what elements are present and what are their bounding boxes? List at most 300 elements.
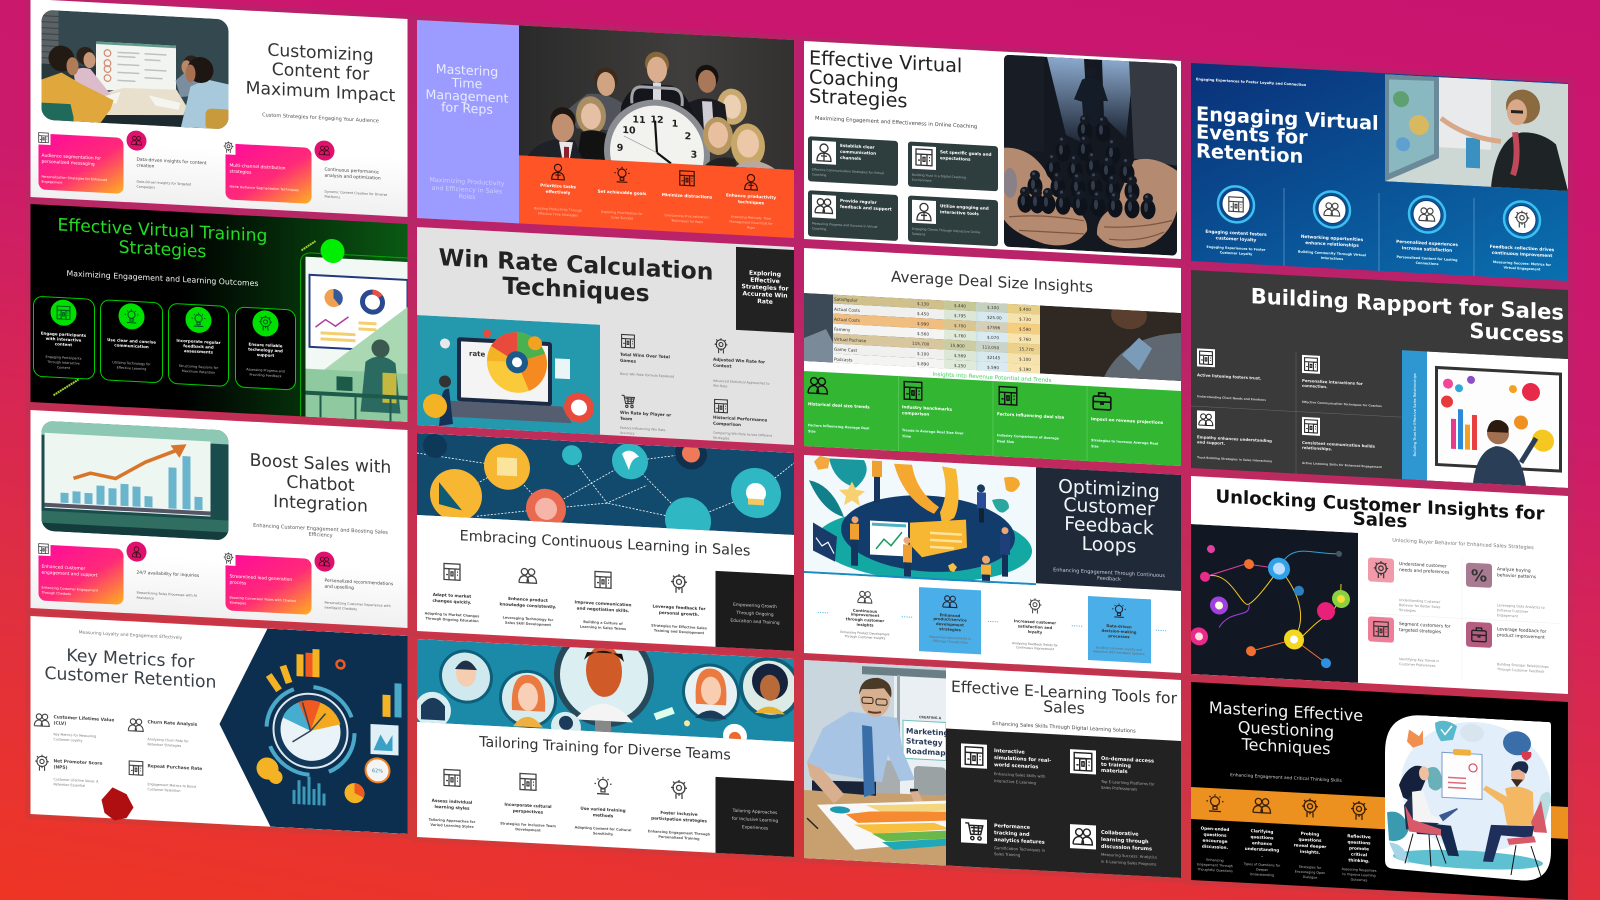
photo: revenue table: $.130 — [917, 301, 929, 307]
metric: historical performance: Strategies — [713, 436, 730, 441]
item 4: personal growth. — [659, 610, 700, 617]
title: Embracing Continuous Learning in Sales — [460, 528, 750, 560]
card 2: creation — [136, 163, 155, 170]
loop steps: processes — [1108, 633, 1130, 639]
coaching card 1: channels — [840, 155, 862, 161]
metric: win rate by player: Factors Influencing Win Rate — [620, 426, 665, 432]
green accent dot and outline — [300, 237, 408, 422]
title: Techniques — [502, 272, 650, 307]
dark tools panel: Gamification Techniques in — [994, 845, 1046, 853]
item 1: Varied Learning Styles — [430, 823, 474, 829]
dark tools panel — [946, 729, 1181, 878]
photo: revenue table: $.560 — [917, 331, 929, 337]
woman — [1399, 765, 1459, 868]
title: Success — [1469, 318, 1564, 348]
photo: revenue table: $.100 — [1019, 356, 1031, 362]
item: consistent communication: Active Listening Skills for Enhanced Engagement — [1302, 461, 1383, 469]
card 3: Niche Audience Segmentation Techniques — [230, 185, 299, 192]
subtitle: Maximizing Engagement and Effectiveness in Online Coaching — [815, 116, 977, 130]
task columns: Exploring Prioritization for — [601, 210, 643, 216]
task columns: Sales Success — [611, 215, 633, 220]
metric: adjusted win rate: Adjusted Win Rate for — [713, 357, 766, 364]
dark title panel: Feedback — [1097, 576, 1121, 583]
blue highlight cards — [919, 587, 1151, 663]
loop steps — [817, 587, 1167, 657]
coaching card 1: Effective Communication Strategies for Virtual — [812, 167, 884, 175]
item 4 — [648, 778, 711, 842]
photo: revenue table: Game Cast — [834, 347, 857, 353]
photo: revenue table: $.760 — [1019, 336, 1031, 342]
question types: Dialogue — [1303, 875, 1317, 880]
orange band with icons — [1191, 787, 1568, 839]
blonde woman back — [717, 88, 747, 125]
title: Effective E-Learning Tools for — [951, 678, 1178, 708]
photo: revenue table: $.890 — [917, 361, 929, 367]
item 4: Enhancing Engagement Through — [648, 829, 711, 837]
card 1 — [36, 130, 124, 194]
loop steps: insights — [856, 622, 874, 628]
training cards: feedback and — [183, 343, 214, 350]
question types: insights. — [1300, 849, 1321, 855]
title: Key Metrics for — [66, 646, 195, 673]
black callout: Through Ongoing — [735, 610, 774, 618]
lilac side panel: Roles — [459, 193, 475, 201]
photo: meeting at a whiteboard — [42, 10, 232, 132]
question types: questions — [1298, 837, 1322, 843]
question types: Outcomes — [1351, 877, 1368, 882]
coaching card 1: Establish clear — [840, 143, 876, 150]
dark tools panel: Performance — [994, 823, 1031, 831]
photo: revenue table: 15,770 — [1019, 346, 1034, 352]
insight 1 — [1368, 557, 1450, 615]
item 4: Training and Development — [654, 629, 705, 635]
metric: total wins — [620, 334, 674, 379]
item 1 — [425, 562, 479, 623]
question types: discussion. — [1202, 844, 1229, 850]
training cards: Content — [57, 365, 71, 370]
question types: Probing — [1301, 831, 1319, 837]
title: Sales — [1043, 698, 1085, 718]
title: Customizing — [267, 41, 374, 66]
card 3 — [222, 140, 312, 204]
training cards: Utilizing Technology for — [112, 360, 151, 366]
coaching card 3: feedback and support — [840, 204, 892, 212]
item 4 — [651, 572, 707, 635]
photo: team around a clock — [519, 26, 794, 170]
title: Integration — [273, 492, 368, 517]
insight 1: Understand customer — [1399, 561, 1447, 570]
slide: Mastering Time Management for Reps — [412, 15, 799, 243]
slide: Tailoring Training for Diverse Teams — [412, 617, 801, 862]
metric: churn: Churn Rate Analysis — [148, 719, 198, 728]
dark tools panel: materials — [1101, 768, 1128, 775]
coaching card 2: expectations — [940, 155, 971, 162]
green stats band: Historical deal size trends — [808, 401, 870, 410]
metric: NPS — [35, 754, 102, 789]
item 4: participation strategies — [651, 815, 707, 823]
event columns: increase satisfaction — [1402, 245, 1452, 254]
metric: CLV: Customer Loyalty — [53, 737, 83, 743]
blue strip: Building Trust for Effective Sales Relationships — [1413, 373, 1417, 457]
dark tools panel: On-demand access — [1101, 756, 1154, 765]
insight 3: targeted strategies — [1399, 627, 1442, 635]
black callout: Effective — [750, 277, 780, 285]
subtitle: Maximizing Engagement and Learning Outcomes — [67, 269, 258, 288]
item 3: Learning in Sales Teams — [580, 625, 626, 631]
insight 4: Leverage feedback for — [1497, 626, 1547, 635]
card 4: Platforms — [324, 195, 340, 199]
title: Coaching — [809, 65, 899, 93]
question types — [1196, 825, 1377, 883]
title: Win Rate Calculation — [439, 243, 713, 286]
question types: questions — [1203, 832, 1227, 838]
insight 2: Analyze buying — [1497, 566, 1531, 574]
item 1: Adapting to Market Changes — [425, 611, 479, 618]
dark title panel — [1036, 467, 1181, 591]
photo: revenue table: $2145 — [987, 355, 1001, 360]
card 4: analysis and optimization — [324, 173, 381, 182]
item 2 — [499, 567, 557, 627]
training cards: Maximum Retention — [182, 369, 215, 375]
item 2: Enhance product — [508, 596, 548, 603]
photo: revenue table: $.100 — [917, 351, 929, 357]
clock: 9 — [617, 143, 623, 154]
dashboard panel — [216, 626, 408, 834]
title: Mastering Effective — [1209, 698, 1363, 725]
card 2: Assistance — [136, 596, 154, 601]
loop steps: Continuous Improvement — [1016, 645, 1055, 651]
coaching card 2: Building Trust in a Digital Coaching — [912, 173, 966, 180]
insight 2: Leveraging Data Analytics to — [1497, 603, 1545, 610]
training cards: Incorporate regular — [176, 338, 221, 345]
question types: Understanding — [1250, 872, 1274, 877]
black callout: Accurate Win — [743, 290, 787, 300]
metric: win rate by player: Win Rate by Player or — [620, 410, 672, 418]
green stats band — [804, 371, 1181, 466]
question types: Clarifying — [1251, 828, 1273, 834]
dark tools panel: Enhancing Sales Skills with — [994, 771, 1046, 779]
question types: Types of Questions for — [1243, 862, 1281, 868]
poster board — [903, 714, 949, 761]
item: consistent communication — [1302, 417, 1383, 469]
item: active listening — [1197, 348, 1266, 402]
metric: CLV: (CLV) — [53, 720, 66, 727]
blonde woman left — [576, 95, 615, 160]
question types: Thoughtful Questions — [1196, 867, 1233, 873]
task columns: Boosting Productivity Through — [534, 206, 582, 213]
item: active listening: Understanding Client Needs and Emotions — [1197, 394, 1266, 402]
item 3 — [575, 775, 631, 837]
item 2: Development — [515, 827, 541, 833]
photo: presenter at a screen — [1385, 74, 1568, 191]
metric: adjusted win rate: Advanced Statistical Approaches to — [713, 379, 770, 386]
metric: NPS: Retention Essential — [53, 782, 85, 788]
card 2 — [126, 130, 207, 192]
task columns — [534, 162, 776, 231]
title: Content for — [272, 60, 370, 85]
item 2 — [500, 772, 556, 833]
lilac side panel: and Efficiency in Sales — [432, 185, 502, 196]
photo: revenue table: $.730 — [1019, 316, 1031, 322]
coaching card 1 — [808, 136, 898, 186]
illustration: two people with clipboard — [1385, 713, 1551, 882]
photo: revenue table: Actual Costs — [834, 317, 860, 323]
slide: Optimizing Customer Feedback Loops — [799, 450, 1186, 678]
card 4: Intelligent Chatbots — [324, 606, 357, 611]
dark tools panel: Interactive E-Learning — [994, 778, 1036, 785]
task columns: Assessing Methods: Time — [731, 215, 771, 221]
item 3: Use varied training — [580, 806, 626, 813]
illustration: laptop with donut chart — [417, 315, 600, 435]
dark tools panel: to training — [1101, 762, 1131, 769]
task columns: Management Essentials for — [729, 220, 773, 226]
illustration: diverse faces — [417, 639, 794, 742]
dark tools panel: Sales Professionals — [1101, 785, 1137, 792]
loop steps: Through Customer Insights — [844, 634, 886, 640]
card 1 — [36, 541, 124, 605]
loop steps: Data-driven — [1106, 623, 1132, 629]
metric: NPS: (NPS) — [53, 764, 68, 771]
event columns: Measuring Success: Metrics for — [1493, 260, 1551, 267]
clipboard — [1442, 748, 1482, 799]
title: Techniques — [1241, 735, 1330, 758]
card 4: and upselling — [324, 584, 354, 591]
man right back — [689, 64, 728, 130]
item 2: Leveraging Technology for — [503, 616, 554, 622]
item: consistent communication: relationships. — [1302, 445, 1333, 452]
card 4: Continuous performance — [324, 167, 379, 175]
item: empathy: Trust-Building Strategies in Sales Interactions — [1197, 455, 1272, 463]
task columns: Enhance productivity — [726, 192, 776, 200]
metric: total wins: Total Wins Over Total — [620, 352, 671, 359]
item: personalize interactions — [1302, 355, 1382, 408]
photo: revenue table: 115,700 — [912, 341, 930, 347]
item 1: Tailoring Approaches for — [429, 818, 476, 824]
insight 3: Customer Preferences — [1399, 662, 1436, 668]
slide: Effective Virtual Training Strategies — [26, 199, 412, 427]
item 4: Strategies for Effective Sales — [651, 623, 707, 630]
green stats band: Industry benchmarks — [902, 404, 953, 412]
question types: critical — [1351, 851, 1368, 857]
green stats band: Size — [808, 429, 816, 434]
loop steps: through customer — [846, 616, 884, 623]
loop steps: loyalty — [1028, 629, 1043, 635]
photo: hands holding a pyramid of figures — [1003, 55, 1177, 256]
task columns: Effective Time Strategies — [538, 211, 578, 218]
event columns — [1205, 184, 1555, 280]
question types: questions — [1250, 834, 1274, 840]
item 3: Improve communication — [575, 599, 631, 607]
clock: 3 — [691, 150, 697, 161]
item 1 — [429, 769, 476, 829]
title: Effective Virtual Training — [58, 215, 267, 247]
metric: historical performance: Historical Performance — [713, 415, 767, 423]
loop steps: Offerings Through Data — [932, 639, 968, 645]
insight 1: Strategies — [1399, 608, 1416, 613]
card 1: Through Chatbots — [41, 591, 71, 596]
black callout: Experiences — [742, 824, 769, 832]
item 3: Adapting Content for Cultural — [575, 825, 631, 832]
insight 2 — [1466, 563, 1545, 620]
item 3: Sensitivity — [593, 831, 614, 836]
black callout — [716, 777, 794, 857]
man centre — [621, 52, 689, 112]
card 4: Dynamic Content Creation for Diverse — [324, 190, 387, 197]
training cards: content — [55, 341, 72, 347]
black callout: for Inclusive Learning — [732, 816, 778, 824]
metric: churn: Analyzing Churn Rate for — [148, 737, 189, 743]
training cards: Structuring Sessions for — [179, 364, 219, 370]
clock: 1 — [672, 119, 678, 130]
title: Strategies — [809, 84, 907, 112]
photo: revenue table: $.190 — [1019, 366, 1031, 372]
subtitle: Efficiency — [308, 532, 333, 539]
card 2: Streamlining Sales Processes with AI — [136, 591, 197, 598]
loop steps: ••••• — [901, 614, 913, 620]
coaching card 4 — [908, 196, 998, 246]
insight 1: Understanding Customer — [1399, 598, 1441, 604]
red octagon — [102, 787, 134, 821]
dark tools panel: Top E-Learning Platforms for — [1100, 779, 1155, 787]
item 3: and negotiation skills. — [577, 605, 630, 613]
item: personalize interactions: Effective Communication Techniques for Coaches — [1302, 400, 1382, 408]
black callout: Education and Training — [730, 618, 780, 626]
dark tools panel: world scenarios — [994, 762, 1038, 770]
question types: enhance — [1252, 840, 1272, 846]
question types: . — [1261, 853, 1263, 858]
coaching card 2: Set specific goals and — [940, 149, 991, 157]
green stats band: Size — [1091, 444, 1099, 449]
slide: Win Rate Calculation Techniques — [412, 222, 799, 450]
metric: NPS: Customer Lifetime Value: A — [53, 777, 99, 784]
training cards: support — [257, 352, 274, 358]
item 1: changes quickly. — [432, 598, 472, 605]
item: empathy: Empathy enhances understanding — [1197, 434, 1272, 443]
coaching card 1: Coaching — [812, 172, 826, 177]
insight 1: Behavior for Better Sales — [1399, 603, 1441, 609]
card 2: Data-Driven Insights for Targeted — [136, 180, 191, 187]
question types: Assessing Responses — [1342, 867, 1377, 873]
lilac side panel: Time — [451, 75, 483, 91]
insight 2: Engagement — [1497, 613, 1519, 618]
lilac side panel: for Reps — [441, 99, 493, 117]
man front left — [528, 105, 582, 159]
squiggles — [54, 227, 316, 409]
metric: CLV: Customer Lifetime Value — [53, 714, 114, 723]
metric: repeat purchase: Customer Retention — [148, 787, 180, 793]
green stats band: Trends in Average Deal Size Over — [902, 428, 964, 435]
title: Building Rapport for Sales — [1251, 283, 1564, 325]
poster board: CREATING A — [919, 715, 942, 720]
event columns: Personalized Content for Lasting — [1396, 255, 1458, 262]
event columns: Networking opportunities — [1301, 234, 1364, 243]
item: empathy: and support. — [1197, 439, 1226, 446]
question types: Enhancing — [1206, 858, 1224, 863]
task columns: Reps — [747, 225, 755, 230]
dark tools panel: simulations for real- — [994, 755, 1051, 764]
card 4: Personalized recommendations — [324, 578, 394, 587]
card 2 — [126, 541, 200, 603]
dark title panel: Customer — [1063, 495, 1155, 521]
slide: Mastering Effective Questioning Techniques — [1186, 677, 1573, 900]
photo: revenue table: 15,900 — [950, 343, 965, 349]
green stats band: Industry Comparisons of Average — [997, 433, 1060, 441]
question types: questions — [1347, 839, 1371, 846]
loop steps: Analyzing Feedback Trends for — [1012, 641, 1059, 647]
card 1: Engagement — [41, 180, 63, 185]
black callout: Empowering Growth — [733, 602, 777, 610]
blonde women right — [703, 116, 775, 169]
metric: NPS: Net Promoter Score — [53, 758, 102, 767]
training cards — [34, 296, 296, 390]
item 1: Through Ongoing Education — [425, 616, 479, 623]
title: Boost Sales with — [250, 451, 391, 478]
card 4: Personalizing Customer Experience with — [324, 601, 391, 608]
question types: Open-ended — [1201, 826, 1229, 832]
clock: 2 — [685, 131, 691, 143]
slide: Building Rapport for Sales Success — [1186, 265, 1573, 493]
green stats band: Deal Size — [997, 439, 1015, 444]
green stats band: Impact on revenue projections — [1091, 416, 1164, 425]
loop steps: ••••• — [987, 619, 999, 624]
loop steps: ••••• — [1071, 623, 1083, 629]
coaching card 4: Sessions — [912, 232, 926, 236]
poster board: Marketing — [906, 726, 949, 738]
card 3: Boosting Conversion Rates with Chatbot — [230, 596, 297, 603]
card 1: personalized messaging — [41, 159, 95, 167]
slide: Effective Virtual Coaching Strategies — [799, 36, 1186, 264]
card 1: Enhanced customer — [41, 564, 85, 572]
training cards: with interactive — [46, 336, 82, 343]
question types: understanding — [1245, 846, 1279, 853]
item 3: Building a Culture of — [583, 620, 623, 626]
training cards: technology and — [248, 347, 283, 353]
coaching card 3: Measuring Progress and Success in Virtual — [812, 221, 878, 229]
training cards: Providing Feedback — [249, 373, 282, 378]
subtitle: Enhancing Engagement and Critical Thinking Skills — [1230, 772, 1343, 784]
dark tools panel: discussion forums — [1101, 844, 1152, 852]
green stats band: Strategies to Increase Average Deal — [1091, 438, 1158, 446]
item 1: Assess individual — [432, 798, 473, 805]
metric: win rate by player: Team — [620, 416, 633, 421]
metric: win rate by player: Accuracy — [620, 431, 635, 436]
question types: reveal deeper — [1294, 842, 1327, 849]
item 4: Personalized Training — [658, 835, 700, 841]
event columns: Feedback collection drives — [1490, 244, 1555, 253]
loop steps: Enhancing Product Development — [840, 630, 890, 637]
card 2: Data-driven insights for content — [136, 157, 207, 166]
card 3: Multi-channel distribution — [230, 163, 286, 172]
loop steps: ••••• — [817, 610, 829, 615]
question types: Deeper — [1256, 867, 1269, 872]
clock: 11 — [632, 114, 646, 126]
clock: 12 — [650, 114, 664, 126]
dark tools panel: in E-Learning Sales Programs — [1101, 859, 1156, 867]
metric: total wins: Games — [620, 358, 636, 364]
title: Average Deal Size Insights — [891, 268, 1093, 296]
photo: revenue table: Virtual Pachase — [834, 337, 867, 343]
loop steps: improvement — [851, 611, 879, 618]
photo: revenue table: Fameny — [834, 327, 851, 332]
item: personalize interactions: Personalize interactions for — [1302, 378, 1363, 386]
training cards: Engage participants — [41, 331, 87, 338]
dark tools panel: learning through — [1101, 837, 1149, 845]
training cards: assessments — [184, 348, 214, 355]
illustration: presenter at whiteboard — [1427, 352, 1568, 488]
item 4: Foster inclusive — [660, 810, 698, 817]
slide: Customizing Content for Maximum Impact — [26, 0, 412, 222]
metric: repeat purchase — [129, 761, 202, 794]
